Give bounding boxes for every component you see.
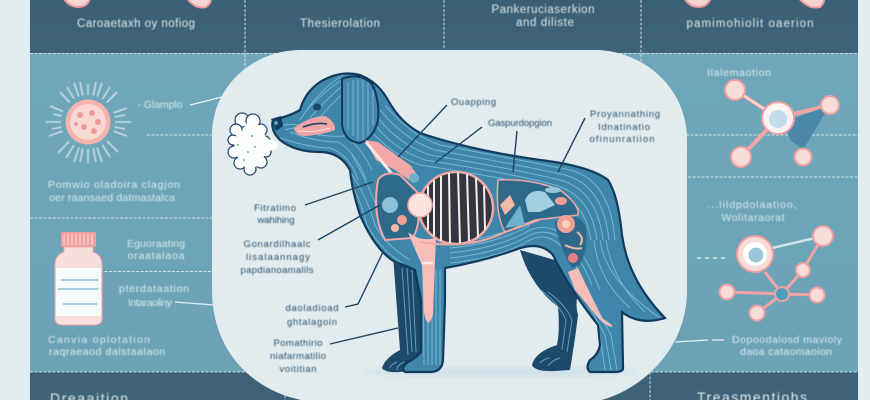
arrow: right cell leader	[675, 340, 724, 342]
dog outline	[272, 74, 665, 372]
label: Proyannathing: ofinunratiion	[590, 134, 654, 145]
abdomen organs	[497, 180, 578, 232]
label: Fitratimo: wahihing	[256, 215, 294, 226]
icon: top right pink shapes	[683, 0, 824, 8]
label: Pomathirio: Pomathirio	[274, 338, 322, 349]
text block: left cell 2: raqraeaod dalstaalaon	[49, 346, 165, 358]
arrow: bottle leader	[175, 302, 214, 305]
text block: bottle label 2: Intaraoliny	[128, 297, 173, 309]
far front leg	[382, 255, 425, 372]
hip organs	[555, 215, 587, 268]
text block: right cell label: Wolitaraorat	[722, 212, 785, 224]
text block: left cell 1: Pomwio oladoira clagjon	[48, 179, 180, 191]
icon: top left pink shapes	[62, 0, 211, 8]
pink heart ball	[408, 193, 432, 217]
label: Proyannathing: Idnatinatio	[598, 122, 650, 133]
label: Gonardilhaalc: papdianoamalils	[240, 265, 314, 276]
label: Ouapping: Ouapping	[451, 97, 496, 108]
ground shadow	[360, 367, 640, 377]
illustration: dog anatomy	[271, 74, 665, 372]
arrows: anatomy leader lines	[305, 105, 585, 344]
label: Gonardilhaalc: Gonardilhaalc	[244, 239, 311, 250]
label: daoladioad: daoladioad	[286, 303, 338, 314]
label: Pomathirio: voititian	[280, 364, 316, 375]
icon: molecule 2	[697, 226, 833, 320]
text block: right cell 2: Dopoodalosd mavioly	[732, 334, 843, 346]
label: Proyannathing: Proyannathing	[590, 109, 660, 120]
label: Pomathirio: niafarmatilio	[270, 351, 326, 362]
heading: top column 1: Caroaetaxh oy nofiog	[77, 18, 195, 30]
rib cage	[419, 172, 493, 244]
label: molecule 1: Ilalemaotion	[707, 67, 771, 79]
text block: bottle label 1: Eguoraating	[127, 238, 185, 250]
lower chest pink line	[420, 212, 558, 244]
eye	[313, 104, 321, 110]
throat pink	[365, 140, 418, 182]
icon: medicine bottle	[55, 232, 102, 325]
snout mark	[294, 116, 335, 136]
text block: left cell 1: oer raansaed datmastalca	[49, 192, 175, 204]
body stripes	[385, 105, 615, 240]
label: daoladioad: ghtalagoin	[287, 317, 337, 328]
dog body silhouette	[272, 74, 665, 372]
panel: top header band	[30, 0, 858, 53]
label: Fitratimo: Fitratimo	[254, 203, 296, 214]
heading: top column 2: Thesierolation	[300, 18, 380, 30]
panel: middle teal band	[30, 53, 858, 372]
tail underside	[601, 240, 665, 320]
label: Gaspurdopgion: Gaspurdopgion	[488, 118, 552, 129]
chest cavity	[376, 173, 420, 240]
label: Gonardilhaalc: lisalaannagy	[246, 252, 310, 263]
text block: right cell 2: daoa cataomaoion	[740, 346, 832, 358]
text block: right cell label: ...Iildpdolaatioo,	[708, 199, 796, 211]
icon: sun cell	[46, 82, 131, 163]
front leg pink	[408, 232, 436, 323]
ear	[342, 76, 378, 143]
nose	[271, 116, 283, 131]
far hind leg	[520, 250, 590, 371]
heading: top column 3: Pankeruciaserkion	[492, 4, 594, 16]
text block: bottle label 1: oraatalaoa	[128, 250, 185, 262]
panel: bottom band	[30, 372, 858, 400]
text block: bottle label 2: pterdataation	[119, 283, 189, 295]
text block: left cell 2: Canvia oplotation	[48, 334, 150, 346]
heading: top column 4: pamimohiolit oaerion	[686, 18, 814, 30]
label: sun cell: - Glamplo	[138, 99, 183, 111]
arrow: sun label leader	[190, 96, 226, 105]
icon: breath cloud	[228, 113, 278, 175]
icon: molecule 1	[725, 80, 839, 167]
hind leg pink	[568, 268, 612, 327]
panel: central rounded dog card	[212, 50, 687, 400]
heading: top column 3: and diliste	[516, 17, 574, 29]
